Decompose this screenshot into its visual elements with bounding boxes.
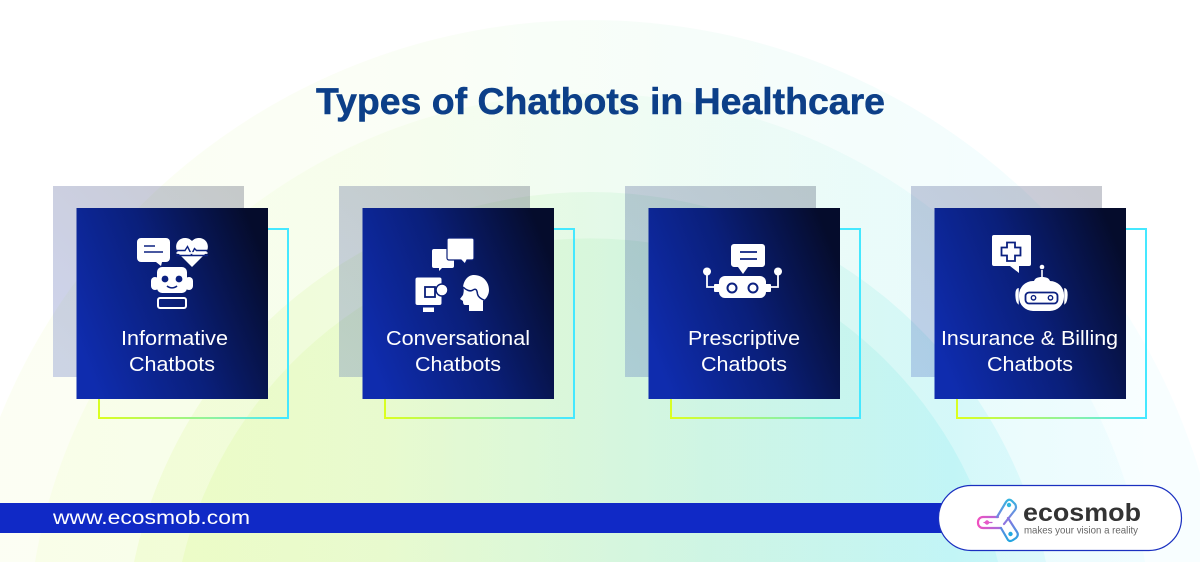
front panel xyxy=(934,208,1126,399)
footer bar with website: www.ecosmob.com xyxy=(52,508,250,529)
back panel xyxy=(625,186,816,377)
card: Conversational Chatbots xyxy=(339,186,574,418)
logo pill xyxy=(938,486,1182,550)
card label xyxy=(386,327,530,376)
card label xyxy=(688,327,800,376)
front panel xyxy=(362,208,554,399)
card label: Informative xyxy=(121,327,228,350)
front panel xyxy=(648,208,840,399)
icon: robot with medical cross bubble xyxy=(992,235,1067,311)
card label: Chatbots xyxy=(415,353,501,376)
card: Prescriptive Chatbots xyxy=(625,186,860,418)
card: Informative Chatbots xyxy=(53,186,288,418)
card label: Insurance & Billing xyxy=(941,327,1118,350)
logo wordmark: ecosmob xyxy=(1023,499,1141,527)
footer bar with website xyxy=(0,503,960,533)
outline frame xyxy=(99,229,288,418)
card label: Chatbots xyxy=(129,353,215,376)
title: Types of Chatbots in Healthcare xyxy=(316,81,885,122)
back panel xyxy=(911,186,1102,377)
card: Insurance & Billing Chatbots xyxy=(911,186,1146,418)
back panel xyxy=(339,186,530,377)
icon: robot with antennas and speech bubble xyxy=(703,244,782,298)
icon: robot and person conversing xyxy=(416,238,489,312)
icon: robot with speech bubble and heart xyxy=(137,238,208,308)
card label: Conversational xyxy=(386,327,530,350)
outline frame xyxy=(385,229,574,418)
logo tagline: makes your vision a reality xyxy=(1024,524,1139,536)
card label: Chatbots xyxy=(987,353,1073,376)
outline frame xyxy=(957,229,1146,418)
card label: Prescriptive xyxy=(688,327,800,350)
card label xyxy=(121,327,228,376)
card label: Chatbots xyxy=(701,353,787,376)
card label xyxy=(941,327,1118,376)
icon: ecosmob logo mark xyxy=(978,500,1018,541)
back panel xyxy=(53,186,244,377)
outline frame xyxy=(671,229,860,418)
front panel xyxy=(76,208,268,399)
